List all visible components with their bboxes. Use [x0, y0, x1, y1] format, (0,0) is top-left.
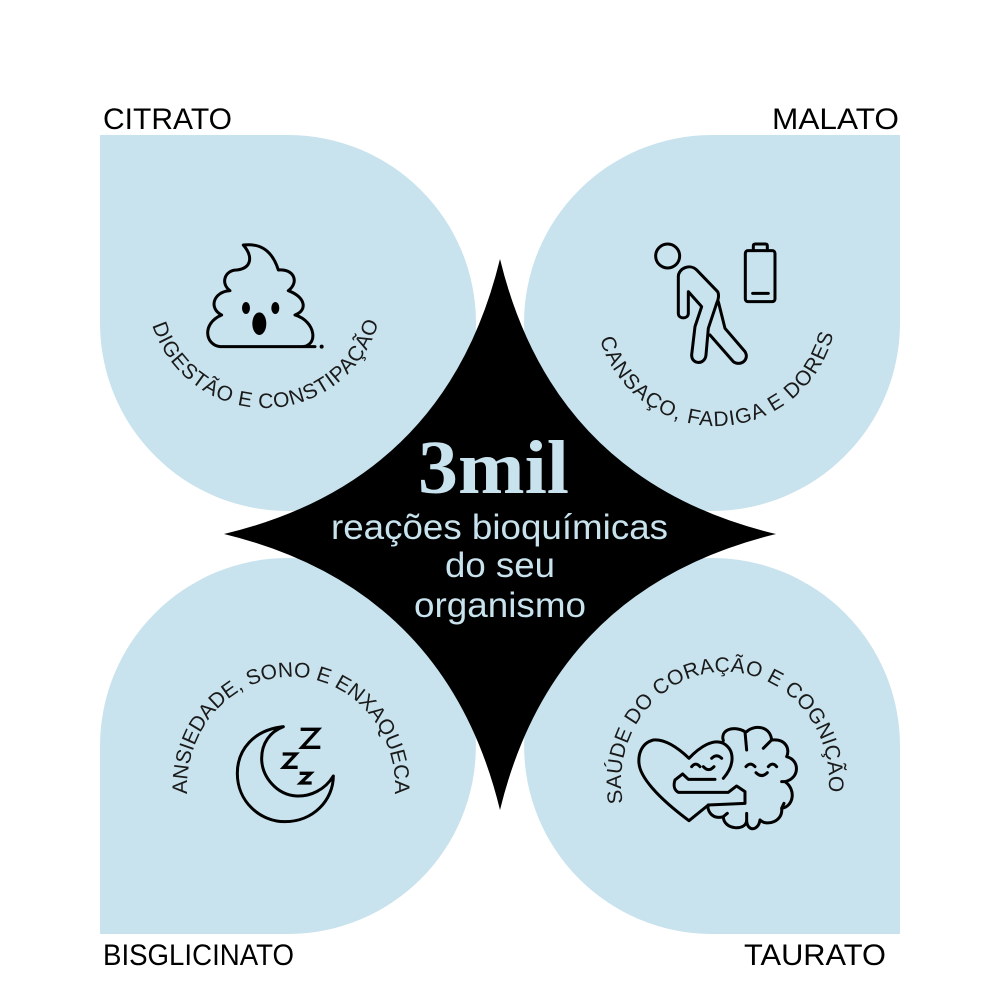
curved text: digestão: DIGESTÃO E CONSTIPAÇÃO [152, 320, 377, 408]
center text: do seu [445, 546, 555, 585]
curved text: ansiedade: ANSIEDADE, SONO E ENXAQUECA [172, 662, 410, 794]
center text: organismo [414, 586, 586, 625]
heading: taurato: TAURATO [744, 939, 886, 972]
heading: citrato: CITRATO [103, 103, 232, 136]
heading: bisglicinato: BISGLICINATO [103, 939, 294, 972]
icon: heart hugging brain [639, 727, 796, 829]
heading: malato: MALATO [772, 103, 899, 136]
curved text: cansaço: CANSAÇO, FADIGA E DORES [602, 332, 832, 426]
panel: bisglicinato [100, 558, 476, 934]
curved text: saúde: SAÚDE DO CORAÇÃO E COGNIÇÃO [604, 654, 847, 803]
panel: citrato [100, 135, 476, 511]
center text: reações bioquímicas [331, 508, 668, 547]
icon: tired person and low battery [656, 244, 775, 363]
icon: moon and zzz [237, 727, 333, 822]
panel: malato [524, 135, 900, 511]
center number: 3mil: 3mil [418, 426, 569, 510]
center text [331, 508, 668, 625]
panel: taurato [524, 558, 900, 934]
icon: poop [208, 245, 324, 349]
central star [224, 259, 776, 810]
